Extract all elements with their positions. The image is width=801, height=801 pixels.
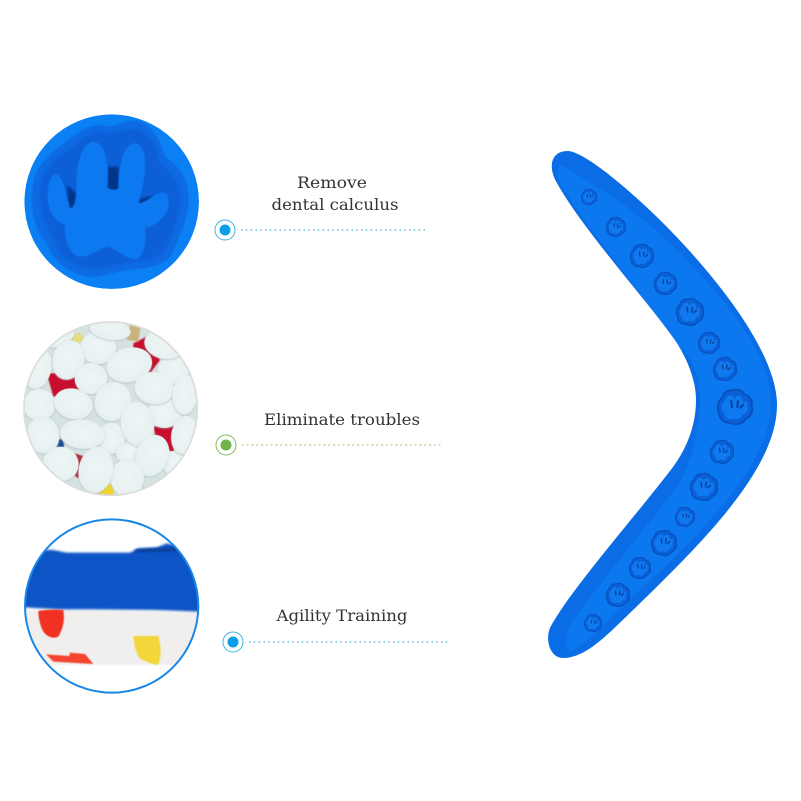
marker: green connector 2 (216, 435, 441, 455)
panel: white beads circle (21, 317, 200, 497)
label: agility training: Agility Training (275, 606, 408, 625)
boomerang toy (548, 151, 777, 658)
marker: blue connector 3 (223, 632, 448, 652)
label: remove dental calculus: dental calculus (272, 195, 398, 214)
label: remove dental calculus (272, 173, 398, 214)
paw prints on boomerang (581, 189, 752, 632)
panel: paw close-up circle (24, 114, 199, 289)
marker: blue connector 1 (215, 220, 428, 240)
label: eliminate troubles: Eliminate troubles (264, 410, 420, 429)
label: remove dental calculus: Remove (297, 173, 367, 192)
panel: toy edge close-up circle (23, 517, 200, 697)
